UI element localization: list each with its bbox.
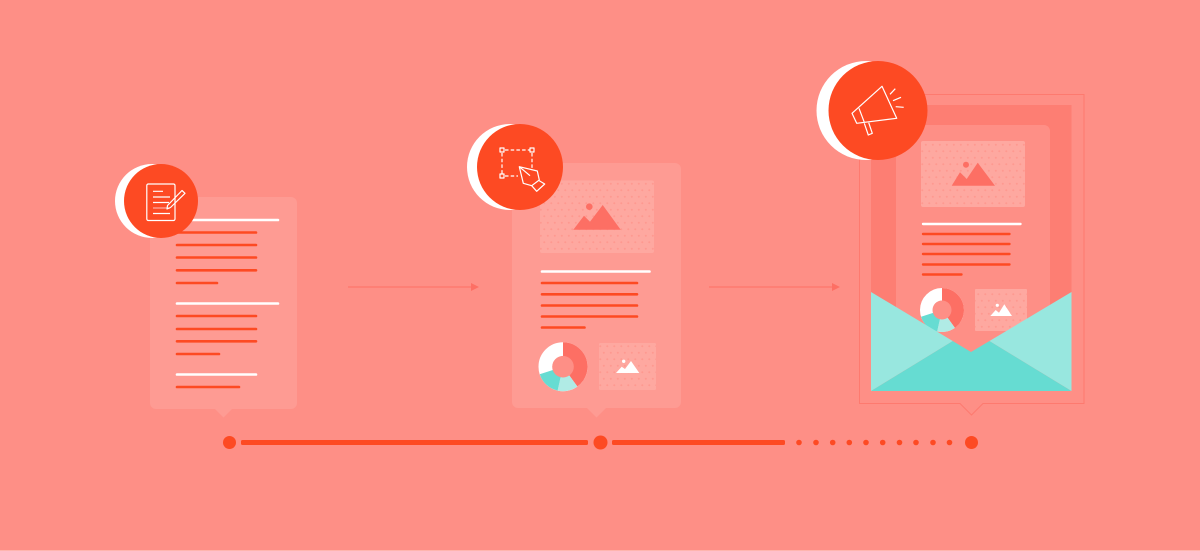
hero image placeholder <box>921 141 1025 207</box>
small image placeholder <box>975 289 1027 331</box>
timeline <box>223 436 978 450</box>
icon: pen tool badge <box>467 124 563 210</box>
small image placeholder <box>599 343 656 390</box>
document card <box>150 197 297 418</box>
panel: published document in envelope <box>860 94 1084 415</box>
arrow: draft to design <box>348 283 479 291</box>
text lines <box>542 272 650 328</box>
document card <box>512 163 681 418</box>
icon: writing document badge <box>115 164 198 238</box>
arrow: design to publish <box>709 283 840 291</box>
icon: megaphone badge <box>816 61 928 160</box>
panel: draft document <box>150 197 297 418</box>
text lines <box>177 220 278 387</box>
document sheet <box>896 125 1050 370</box>
donut chart <box>551 354 575 379</box>
outer outline frame <box>860 94 1084 415</box>
hero image placeholder <box>540 180 654 253</box>
text lines <box>923 224 1020 274</box>
panel: designed document <box>512 163 681 418</box>
donut chart <box>931 299 953 321</box>
envelope back <box>871 105 1072 391</box>
envelope front <box>871 292 1072 391</box>
